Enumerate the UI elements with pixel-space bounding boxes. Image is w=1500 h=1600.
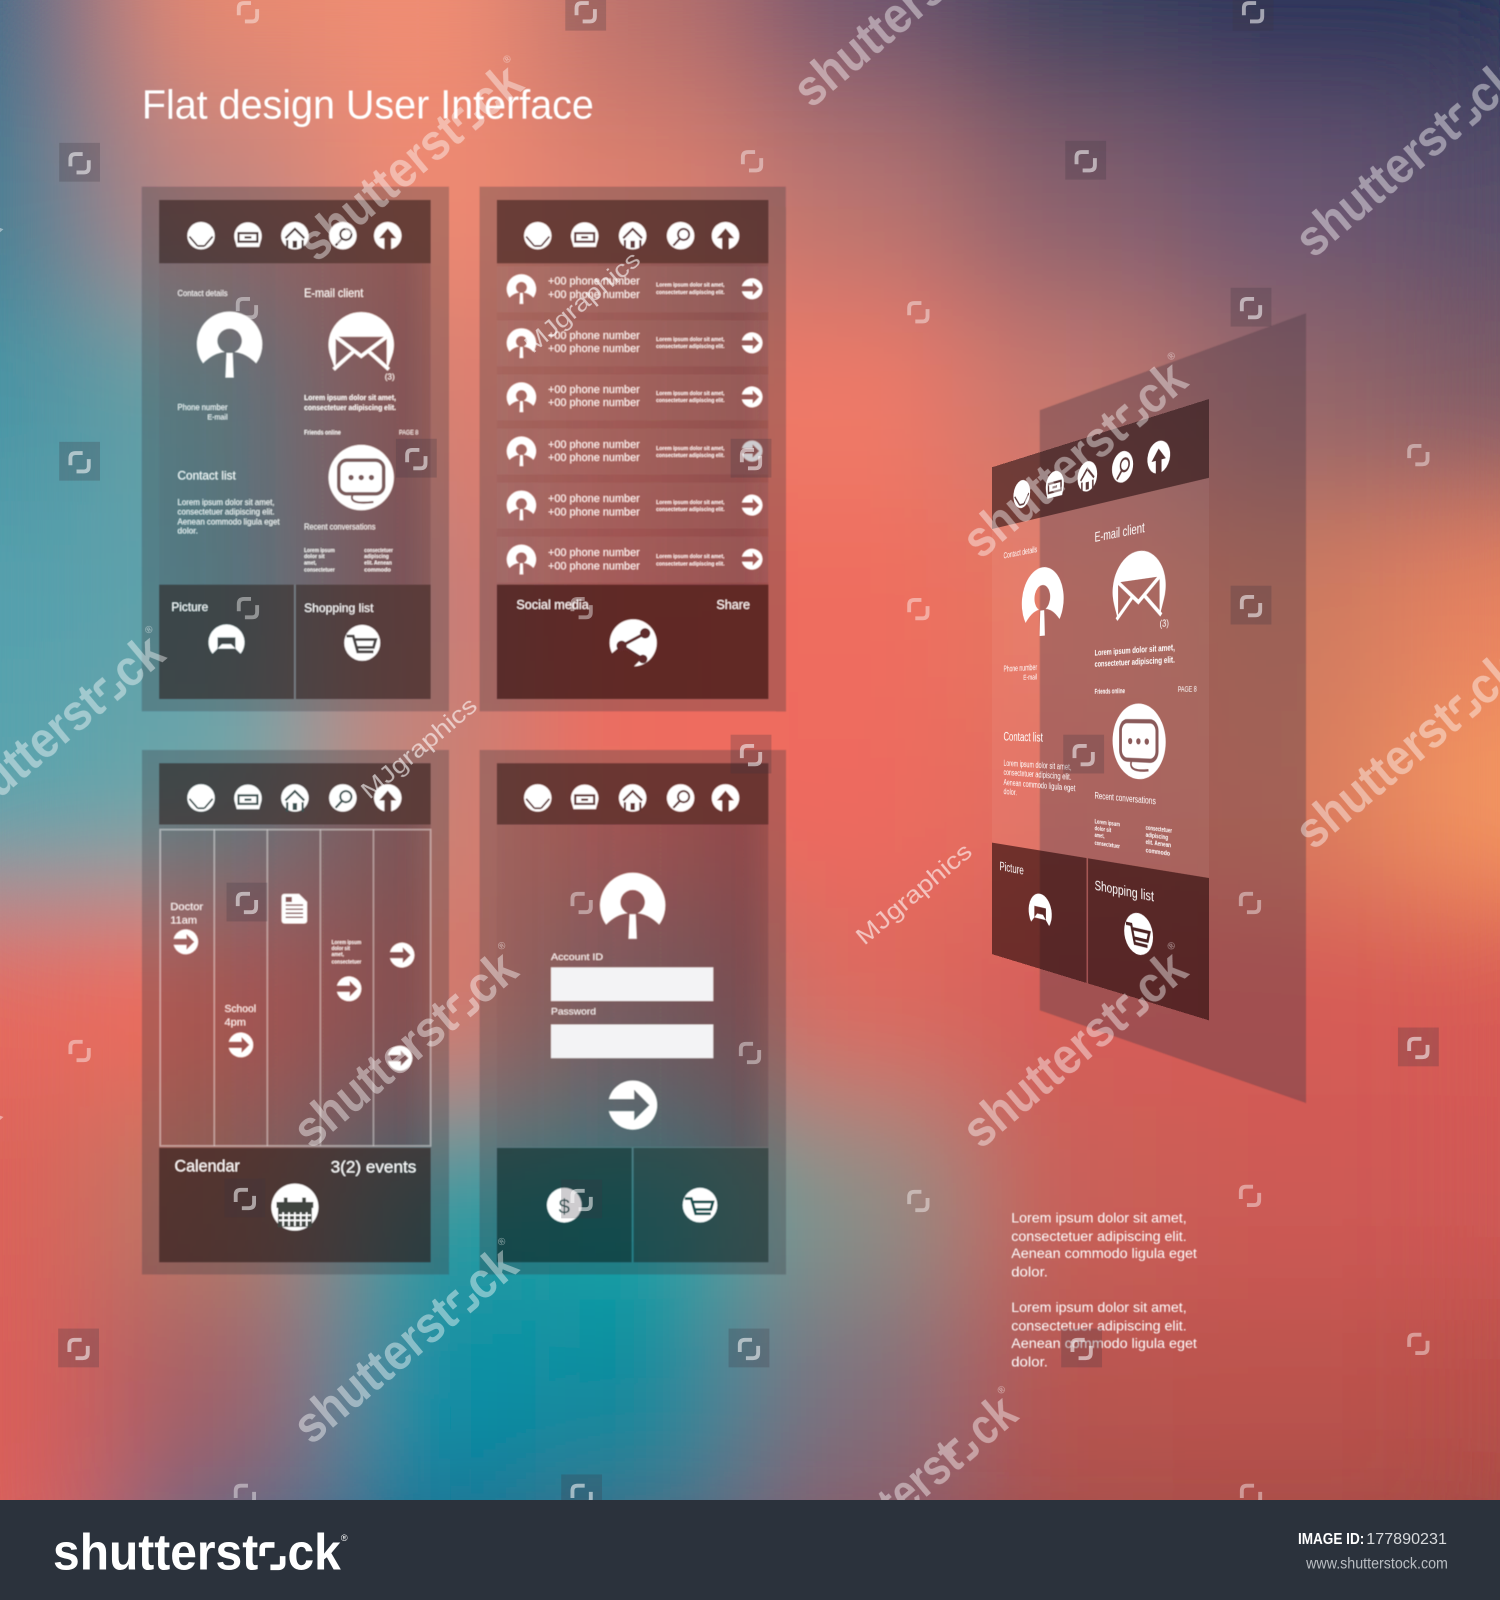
phone row 3: Lorem ipsum dolor sit amet, <box>656 391 725 397</box>
3D contact list <box>1004 731 1075 804</box>
MJgraphics watermarks <box>356 246 978 951</box>
image id: IMAGE ID: <box>1298 1531 1364 1548</box>
footer logo: ® <box>341 1533 348 1543</box>
login footer tiles <box>497 1148 768 1262</box>
event arrows <box>388 943 414 1071</box>
friends online chat block: amet, <box>304 560 317 566</box>
3D friends online: adipiscing <box>1146 831 1171 842</box>
watermark layer: shutterstock <box>282 1235 528 1454</box>
event: doctor: 11am <box>170 915 197 926</box>
phone row 6: +00 phone number <box>548 547 640 559</box>
3D friends online: consectetuer <box>1095 839 1123 850</box>
MJgraphics watermarks: MJgraphics <box>519 246 646 359</box>
friends online chat block: consectetuer <box>304 567 335 573</box>
watermark layer: ® <box>995 1383 1009 1397</box>
contact list block: dolor. <box>178 526 198 536</box>
phone row 2 <box>497 320 768 366</box>
phone row 2: Lorem ipsum dolor sit amet, <box>656 337 725 343</box>
panel 4 header icons <box>497 763 768 824</box>
phone row 2: +00 phone number <box>548 343 640 355</box>
icon: document <box>282 894 307 923</box>
watermark layer: ® <box>496 1235 509 1249</box>
social media footer: Social media <box>516 597 590 612</box>
contact details block: Contact details <box>178 289 228 298</box>
e-mail client block: Lorem ipsum dolor sit amet, <box>304 394 396 402</box>
contact list block: consectetuer adipiscing elit. <box>178 506 274 516</box>
event: school: 4pm <box>224 1018 246 1029</box>
3D e-mail client: Lorem ipsum dolor sit amet, <box>1095 644 1178 658</box>
login arrow <box>609 1081 657 1130</box>
3D contact details: E-mail <box>1023 674 1037 683</box>
contact details block: E-mail <box>207 413 228 421</box>
e-mail client block: E-mail client <box>304 286 364 300</box>
3D friends online: PAGE 8 <box>1178 687 1199 695</box>
3D friends online <box>1095 685 1197 861</box>
lorem text block 2: Aenean commodo ligula eget <box>1011 1336 1197 1352</box>
3D friends online: Friends online <box>1095 689 1129 697</box>
password field: Password <box>551 1006 596 1016</box>
watermark layer: ® <box>496 939 509 953</box>
3D footer tiles: Picture <box>1000 860 1025 879</box>
contact list block: Aenean commodo ligula eget <box>178 516 280 526</box>
3D contact list: Aenean commodo ligula eget <box>1004 779 1083 795</box>
phone row 6 <box>497 537 768 583</box>
3D friends online: amet, <box>1095 831 1106 840</box>
image id: 177890231 <box>1366 1531 1447 1548</box>
phone row 3: +00 phone number <box>548 397 640 409</box>
phone row 4: +00 phone number <box>548 452 640 464</box>
friends online chat block: consectetuer <box>364 548 394 554</box>
friends online chat block: Recent conversations <box>304 523 376 532</box>
phone row 5: Lorem ipsum dolor sit amet, <box>656 500 725 506</box>
3D friends online: dolor sit <box>1095 825 1113 834</box>
watermark layer: shutterstock <box>282 939 528 1158</box>
3D footer tiles <box>992 843 1209 1020</box>
event: small note: Lorem ipsum <box>332 940 361 946</box>
panel: contacts and e-mail <box>142 187 449 711</box>
MJgraphics watermarks: MJgraphics <box>356 692 483 805</box>
panel 2 header icons <box>497 200 768 263</box>
phone row 3: consectetuer adipiscing elit. <box>656 398 725 404</box>
friends online chat block: dolor sit <box>304 554 325 560</box>
picture and shopping list tiles <box>159 585 431 699</box>
login user icon <box>600 873 665 939</box>
back glass plate of 3D view <box>1040 313 1306 1103</box>
3D friends online: elit. Aenean <box>1146 838 1174 849</box>
contact details block <box>178 289 262 421</box>
picture and shopping list tiles: Picture <box>171 600 208 614</box>
3D contact list: consectetuer adipiscing elit. <box>1004 769 1079 783</box>
lorem text block 1: consectetuer adipiscing elit. <box>1011 1229 1187 1245</box>
watermark layer: shutterstock <box>951 939 1198 1158</box>
account id field: Account ID <box>551 952 603 962</box>
e-mail client block: consectetuer adipiscing elit. <box>304 404 396 412</box>
3D e-mail client: E-mail client <box>1095 519 1151 546</box>
calendar grid <box>160 830 431 1146</box>
image id <box>1298 1531 1447 1548</box>
lorem text block 2: consectetuer adipiscing elit. <box>1011 1319 1187 1335</box>
phone row 3: +00 phone number <box>548 384 640 396</box>
panel 1 header icons <box>159 200 431 263</box>
watermark layer: ® <box>501 53 514 66</box>
phone row 4 <box>497 429 768 474</box>
lorem text block 2: Lorem ipsum dolor sit amet, <box>1011 1300 1187 1316</box>
3D contact details: Contact details <box>1004 545 1040 561</box>
phone row 6: Lorem ipsum dolor sit amet, <box>656 554 725 560</box>
panel: phone list <box>480 187 786 711</box>
3D header <box>992 399 1209 529</box>
phone row 6: consectetuer adipiscing elit. <box>656 561 725 567</box>
event: small note: dolor sit <box>332 946 350 952</box>
3D friends online: Lorem ipsum <box>1095 818 1124 828</box>
phone row 1: +00 phone number <box>548 289 640 301</box>
3D contact list: dolor. <box>1004 788 1017 798</box>
3D e-mail client: consectetuer adipiscing elit. <box>1095 656 1179 670</box>
calendar footer <box>159 1148 431 1262</box>
friends online chat block: Lorem ipsum <box>304 548 335 554</box>
event: doctor: Doctor <box>170 902 204 913</box>
phone row 6: +00 phone number <box>548 560 640 572</box>
friends online chat block: Friends online <box>304 430 341 437</box>
phone row 1 <box>497 266 768 312</box>
lorem text block 1: Aenean commodo ligula eget <box>1011 1246 1197 1262</box>
panel: login <box>480 750 786 1274</box>
contact details block: Phone number <box>178 403 228 412</box>
3D content area <box>992 478 1209 878</box>
website: www.shutterstock.com <box>1305 1555 1448 1572</box>
MJgraphics watermarks: MJgraphics <box>851 838 978 951</box>
phone row 4: +00 phone number <box>548 439 640 451</box>
watermark layer: ® <box>1165 350 1178 363</box>
3D friends online: commodo <box>1146 846 1170 857</box>
3D contact list: Contact list <box>1004 731 1045 746</box>
title: Flat design User Interface <box>142 81 594 127</box>
lorem text block 1: Lorem ipsum dolor sit amet, <box>1011 1210 1187 1226</box>
contact list block: Lorem ipsum dolor sit amet, <box>178 497 274 507</box>
e-mail client block <box>304 286 396 412</box>
watermark layer: ® <box>1165 939 1178 953</box>
event: small note <box>332 940 362 1001</box>
event: small note: consectetuer <box>332 959 362 965</box>
watermark layer: ® <box>143 623 156 637</box>
event: school <box>224 1004 256 1057</box>
contact list block: Contact list <box>178 469 236 483</box>
lorem text block 2 <box>1011 1300 1197 1370</box>
phone row 5: +00 phone number <box>548 493 640 505</box>
3D e-mail client: (3) <box>1160 619 1169 630</box>
panel: calendar <box>142 750 449 1274</box>
lorem text block 2: dolor. <box>1011 1354 1048 1370</box>
phone row 2: +00 phone number <box>548 330 640 342</box>
watermark layer: terstock <box>866 1383 1028 1531</box>
phone row 1: +00 phone number <box>548 276 640 288</box>
3D perspective screen <box>992 399 1209 1020</box>
footer logo: shutterstock <box>53 1523 341 1580</box>
lorem text block 1: dolor. <box>1011 1265 1048 1281</box>
social media footer: Share <box>716 597 750 612</box>
social media footer <box>497 585 768 699</box>
phone row 5: consectetuer adipiscing elit. <box>656 507 725 513</box>
3D e-mail client <box>1095 514 1175 670</box>
footer bar <box>0 1500 1500 1600</box>
3D contact list: Lorem ipsum dolor sit amet, <box>1004 760 1079 773</box>
watermark layer: shutterstock <box>287 52 533 272</box>
3D contact details <box>1004 540 1064 683</box>
phone row 3 <box>497 374 768 420</box>
password field <box>551 1006 713 1058</box>
account id field <box>551 952 713 1001</box>
friends online chat block <box>304 430 419 573</box>
contact list block <box>178 469 280 536</box>
friends online chat block: PAGE 8 <box>399 430 419 437</box>
event: doctor <box>170 902 204 954</box>
3D friends online: Recent conversations <box>1095 792 1162 808</box>
event: school: School <box>224 1004 256 1015</box>
event: small note: amet, <box>332 952 344 958</box>
3D footer tiles: Shopping list <box>1095 879 1155 906</box>
picture and shopping list tiles: Shopping list <box>304 601 374 615</box>
calendar footer: Calendar <box>174 1157 240 1175</box>
phone row 4: consectetuer adipiscing elit. <box>656 453 725 459</box>
e-mail client block: (3) <box>385 373 395 382</box>
friends online chat block: commodo <box>364 567 391 573</box>
friends online chat block: adipiscing <box>364 554 389 560</box>
calendar footer: 3(2) events <box>331 1158 416 1176</box>
phone row 1: consectetuer adipiscing elit. <box>656 290 725 296</box>
phone row 4: Lorem ipsum dolor sit amet, <box>656 446 725 452</box>
phone row 1: Lorem ipsum dolor sit amet, <box>656 283 725 289</box>
watermark layer: shutterstock <box>951 349 1198 569</box>
panel 3 header icons <box>159 763 431 824</box>
friends online chat block: elit. Aenean <box>364 560 392 566</box>
login footer tiles: $ <box>559 1196 571 1218</box>
phone row 2: consectetuer adipiscing elit. <box>656 344 725 350</box>
3D contact details: Phone number <box>1004 663 1040 674</box>
phone row 5: +00 phone number <box>548 506 640 518</box>
lorem text block 1 <box>1011 1210 1197 1281</box>
phone row 5 <box>497 483 768 529</box>
3D friends online: consectetuer <box>1146 824 1178 835</box>
